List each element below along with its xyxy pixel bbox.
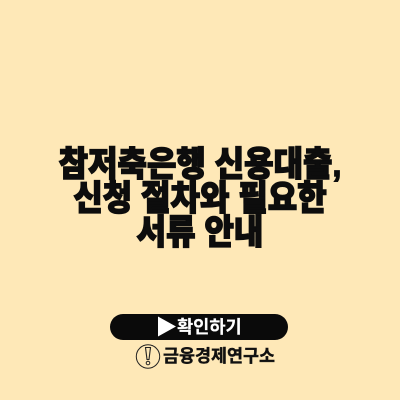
icon: play triangle: [158, 316, 176, 336]
button label: 확인하기: [177, 317, 242, 337]
source attribution: [136, 344, 275, 369]
icon: exclamation circle: [136, 344, 160, 369]
button: confirm: [110, 314, 288, 340]
title: 참저축은행 신용대출,: [59, 145, 341, 183]
source name: 금융경제연구소: [163, 346, 275, 366]
title: 서류 안내: [137, 213, 263, 251]
title: [58, 145, 341, 251]
title: 신청 절차와 필요한: [73, 179, 327, 217]
